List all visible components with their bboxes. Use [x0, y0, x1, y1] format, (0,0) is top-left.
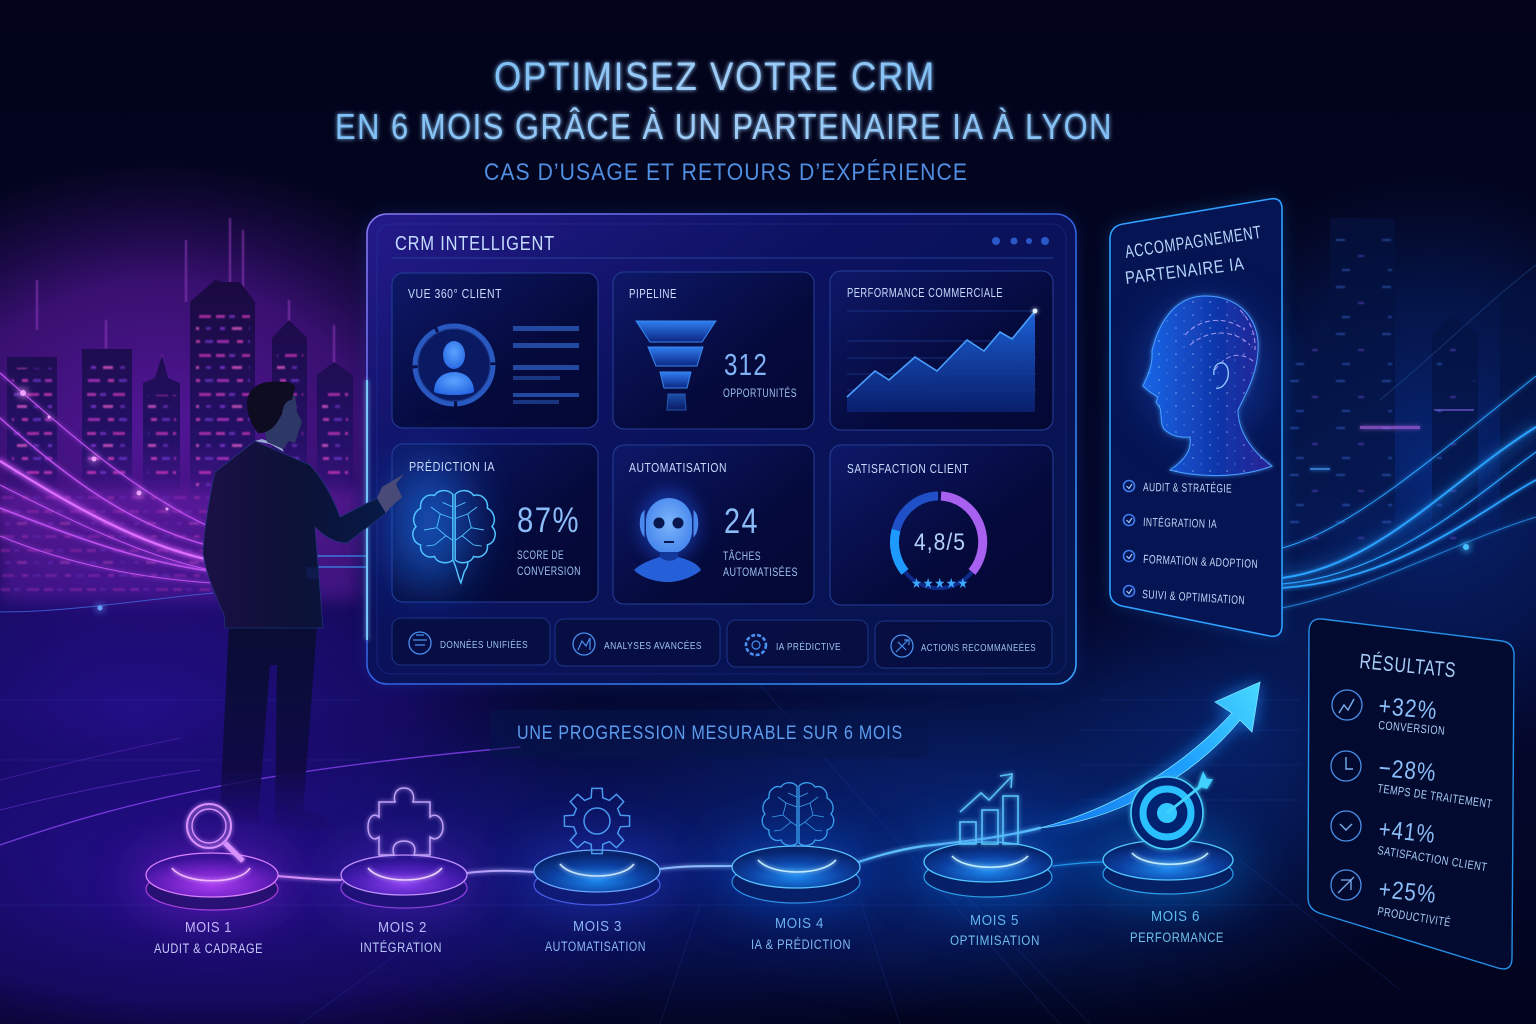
- icon: growth bars: [960, 774, 1018, 844]
- banner: progression: [490, 710, 928, 758]
- card: automatisation: 24: [724, 502, 759, 541]
- card: prediction IA: SCORE DE: [517, 550, 564, 562]
- metric: productivité: [1331, 870, 1452, 930]
- step: mois 1: [132, 804, 292, 956]
- checklist: AUDIT & STRATÉGIE: [1143, 479, 1232, 496]
- feature: IA predictive: IA PRÉDICTIVE: [776, 640, 841, 653]
- step: mois 3: AUTOMATISATION: [545, 939, 646, 954]
- icon: client avatar: [415, 326, 493, 404]
- shirt collar: [255, 439, 284, 452]
- right blue data streams: [1282, 265, 1536, 608]
- window controls: [992, 237, 1049, 245]
- panel: accompagnement partenaire IA: [1110, 199, 1282, 636]
- step: mois 5: MOIS 5: [970, 913, 1019, 929]
- right city skyline: [1285, 218, 1536, 560]
- step: mois 2: [326, 788, 482, 955]
- hand: [377, 474, 404, 513]
- icon: AI head profile: [1143, 296, 1272, 476]
- feature: analyses avancees: [555, 619, 720, 666]
- feature: IA predictive: [727, 620, 868, 667]
- card: prediction IA: PRÉDICTION IA: [409, 459, 495, 474]
- step: mois 3: [519, 788, 675, 954]
- panel: CRM intelligent dashboard: [367, 214, 1076, 684]
- title: EN 6 MOIS GRÂCE À UN PARTENAIRE IA À LYON: [335, 106, 1113, 147]
- card: satisfaction client: SATISFACTION CLIENT: [847, 462, 969, 476]
- step: mois 6: MOIS 6: [1151, 909, 1200, 925]
- metric: conversion: [1332, 690, 1446, 738]
- jacket: [203, 441, 386, 628]
- card: satisfaction client: 4,8/5: [914, 529, 966, 556]
- metric: satisfaction client: SATISFACTION CLIENT: [1377, 843, 1488, 874]
- neck and face: [264, 395, 302, 449]
- title: OPTIMISEZ VOTRE CRM: [494, 55, 936, 99]
- card: automatisation: [613, 445, 814, 604]
- area chart: [847, 309, 1037, 412]
- card: automatisation: TÂCHES: [723, 550, 761, 563]
- card: prediction IA: 87%: [517, 501, 580, 540]
- feature: analyses avancees: ANALYSES AVANCÉES: [604, 639, 702, 652]
- client data bars: [513, 326, 579, 404]
- card: automatisation: AUTOMATISÉES: [723, 566, 798, 579]
- panel heading: CRM INTELLIGENT: [395, 233, 555, 255]
- step: mois 1: AUDIT & CADRAGE: [154, 941, 263, 956]
- panel heading: [1124, 222, 1263, 288]
- checklist: INTÉGRATION IA: [1143, 514, 1217, 531]
- checklist: SUIVI & OPTIMISATION: [1142, 587, 1245, 607]
- step: mois 6: [1090, 771, 1246, 945]
- funnel chart: [636, 321, 716, 410]
- step: mois 5: OPTIMISATION: [950, 933, 1040, 948]
- metric: temps de traitement: TEMPS DE TRAITEMENT: [1377, 781, 1493, 811]
- icon: puzzle piece: [368, 788, 443, 855]
- card: prediction IA: CONVERSION: [517, 566, 581, 578]
- step: mois 1: MOIS 1: [185, 920, 232, 936]
- checklist: [1124, 479, 1258, 607]
- metric: productivité: +25%: [1377, 875, 1438, 909]
- floor grid: [0, 640, 1400, 1024]
- panel heading: RÉSULTATS: [1359, 650, 1457, 682]
- metric: conversion: +32%: [1377, 692, 1439, 725]
- panel heading: PARTENAIRE IA: [1124, 253, 1246, 288]
- icon: brain: [762, 783, 834, 845]
- step: mois 4: IA & PRÉDICTION: [751, 937, 851, 952]
- checklist: FORMATION & ADOPTION: [1143, 552, 1258, 571]
- step: mois 5: [910, 774, 1066, 948]
- step: mois 6: PERFORMANCE: [1130, 930, 1224, 945]
- subtitle: CAS D’USAGE ET RETOURS D’EXPÉRIENCE: [484, 159, 968, 186]
- card: vue 360 client: [392, 273, 598, 428]
- card: vue 360 client: VUE 360° CLIENT: [408, 287, 502, 301]
- icon: magnifier: [187, 804, 243, 861]
- left purple data streams: [0, 373, 520, 845]
- panel heading: ACCOMPAGNEMENT: [1124, 222, 1263, 262]
- step: mois 4: [718, 783, 874, 952]
- feature: donnees unifiees: DONNÉES UNIFIÉES: [440, 638, 528, 651]
- donut gauge: [894, 496, 983, 588]
- card: pipeline: PIPELINE: [629, 287, 677, 301]
- step: mois 4: MOIS 4: [775, 916, 824, 932]
- icon: brain: [413, 491, 495, 583]
- step: mois 2: INTÉGRATION: [360, 940, 442, 955]
- legs: [220, 626, 334, 831]
- feature: actions recommandees: ACTIONS RECOMMANEÉES: [921, 641, 1036, 654]
- banner: progression: UNE PROGRESSION MESURABLE SUR 6 MOIS: [517, 723, 903, 744]
- step: mois 2: MOIS 2: [378, 920, 427, 936]
- metric: conversion: CONVERSION: [1378, 718, 1446, 738]
- panel: résultats: [1308, 619, 1514, 969]
- metric: productivité: PRODUCTIVITÉ: [1377, 903, 1452, 930]
- card: performance commerciale: PERFORMANCE COMMERCIALE: [847, 286, 1003, 300]
- hair: [247, 382, 295, 433]
- icon: target and dart: [1131, 771, 1213, 849]
- left city skyline: [0, 218, 360, 600]
- star rating: ★★★★★: [911, 575, 969, 591]
- card: pipeline: [613, 272, 814, 429]
- icon: gear: [564, 788, 630, 854]
- stream light nodes: [20, 390, 168, 610]
- title: [335, 55, 1113, 147]
- card: performance commerciale: [830, 271, 1053, 430]
- metric: temps de traitement: [1331, 751, 1493, 811]
- card: automatisation: AUTOMATISATION: [629, 461, 727, 475]
- timeline connectors: [277, 828, 1103, 880]
- step: mois 3: MOIS 3: [573, 919, 622, 935]
- figure: businessman pointing at dashboard: [203, 382, 404, 831]
- card: pipeline: OPPORTUNITÉS: [723, 387, 797, 400]
- metric: satisfaction client: +41%: [1377, 815, 1437, 849]
- arrow: growth: [1040, 682, 1260, 828]
- metric: temps de traitement: −28%: [1377, 754, 1438, 787]
- metric: satisfaction client: [1331, 811, 1488, 874]
- card: pipeline: 312: [724, 347, 768, 382]
- card: satisfaction client: [830, 445, 1053, 605]
- feature: actions recommandees: [875, 621, 1052, 668]
- card: prediction IA: [392, 444, 598, 602]
- icon: robot: [634, 489, 701, 582]
- feature strip: [392, 618, 1052, 668]
- feature: donnees unifiees: [392, 618, 550, 665]
